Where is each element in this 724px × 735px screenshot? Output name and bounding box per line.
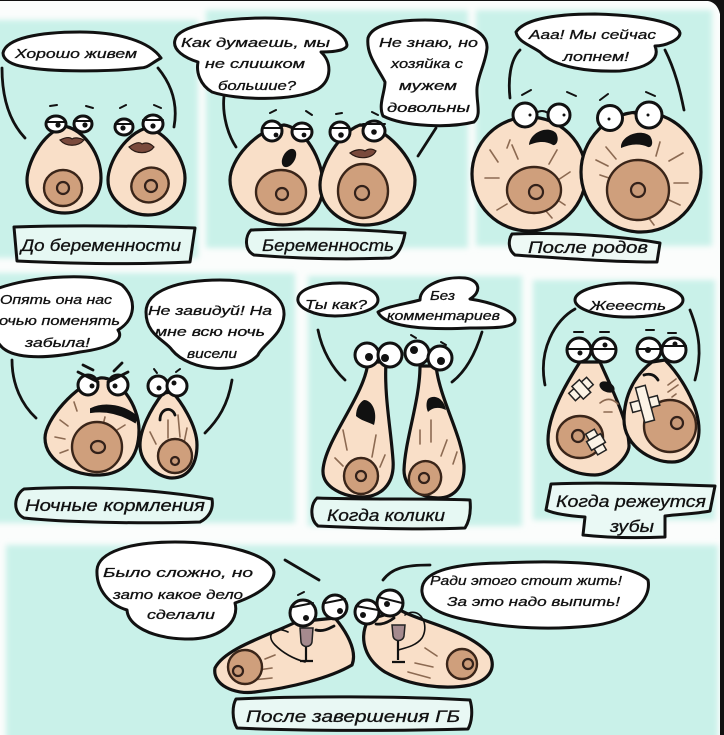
right character — [108, 68, 185, 215]
caption — [312, 498, 470, 529]
speech bubble: forgot to switch: забыла! — [24, 335, 91, 350]
speech bubble: unsure: мужем — [399, 78, 457, 93]
speech bubble: no comment: комментариев — [387, 308, 500, 323]
caption — [546, 483, 715, 538]
caption: Беременность — [262, 236, 394, 255]
speech bubble: too big: большие? — [218, 78, 297, 93]
caption: После завершения ГБ — [246, 707, 460, 726]
right character — [320, 112, 436, 225]
panel: pregnancy — [175, 18, 487, 259]
left character — [543, 309, 629, 475]
speech bubble: too big: не слишком — [205, 56, 305, 71]
panel: teething — [543, 283, 715, 538]
speech bubble: how are you — [298, 283, 378, 316]
caption: зубы — [609, 517, 655, 536]
left character — [472, 50, 586, 231]
speech bubble: it was hard: Было сложно, но — [103, 565, 253, 580]
speech bubble: too big: Как думаешь, мы — [181, 35, 331, 50]
speech bubble: awful — [575, 283, 683, 317]
speech bubble: bursting — [516, 14, 680, 71]
panel: night feedings — [0, 277, 284, 523]
caption — [16, 488, 212, 523]
speech bubble: how are you: Ты как? — [305, 297, 368, 312]
speech bubble: it was hard: зато какое дело — [112, 587, 243, 602]
caption — [233, 697, 472, 730]
speech bubble: it was hard — [97, 542, 274, 639]
caption: До беременности — [19, 236, 182, 255]
speech bubble: no comment — [378, 278, 515, 329]
caption — [509, 233, 660, 262]
speech bubble: worth living: За это надо выпить! — [447, 594, 620, 609]
caption — [246, 229, 405, 259]
right character — [581, 50, 701, 232]
speech bubble: forgot to switch: Опять она нас — [0, 292, 113, 307]
right character — [140, 369, 232, 478]
speech bubble: bursting: лопнем! — [562, 49, 630, 64]
speech bubble: hanging all night: мне всю ночь — [155, 324, 265, 339]
speech bubble: hanging all night: Не завидуй! На — [148, 303, 272, 318]
speech bubble: hanging all night: висели — [187, 346, 237, 361]
panel: colic — [298, 278, 515, 529]
right character — [624, 310, 699, 462]
speech bubble: unsure: довольны — [387, 100, 471, 115]
left character — [2, 68, 101, 213]
speech bubble: worth living: Ради этого стоит жить! — [430, 573, 622, 588]
left character — [12, 360, 139, 475]
panel: after weaning — [97, 542, 648, 730]
caption: Ночные кормления — [25, 496, 205, 515]
speech bubble: worth living — [422, 562, 648, 628]
caption: Когда режеутся — [556, 492, 706, 511]
speech bubble: good life — [3, 32, 161, 71]
speech bubble: forgot to switch — [0, 277, 133, 357]
speech bubble: no comment: Без — [430, 288, 455, 303]
speech bubble: awful: Жееесть — [589, 298, 666, 313]
caption: После родов — [528, 238, 648, 257]
left character with glass — [215, 560, 354, 693]
speech bubble: it was hard: сделали — [147, 607, 215, 622]
speech bubble: bursting: Ааа! Мы сейчас — [528, 27, 657, 42]
speech bubble: unsure — [368, 20, 487, 126]
left character — [318, 330, 402, 497]
speech bubble: unsure: Не знаю, но — [379, 35, 478, 50]
caption — [14, 226, 195, 264]
right character — [404, 332, 482, 499]
speech bubble: too big — [175, 18, 347, 98]
panel: after birth — [472, 14, 701, 262]
caption: Когда колики — [327, 506, 446, 525]
panel: before pregnancy — [2, 32, 195, 264]
left character — [224, 96, 323, 225]
right character with glass — [355, 565, 492, 687]
speech bubble: hanging all night — [146, 280, 284, 368]
speech bubble: unsure: хозяйка с — [390, 56, 464, 71]
speech bubble: good life: Хорошо живем — [14, 46, 137, 61]
